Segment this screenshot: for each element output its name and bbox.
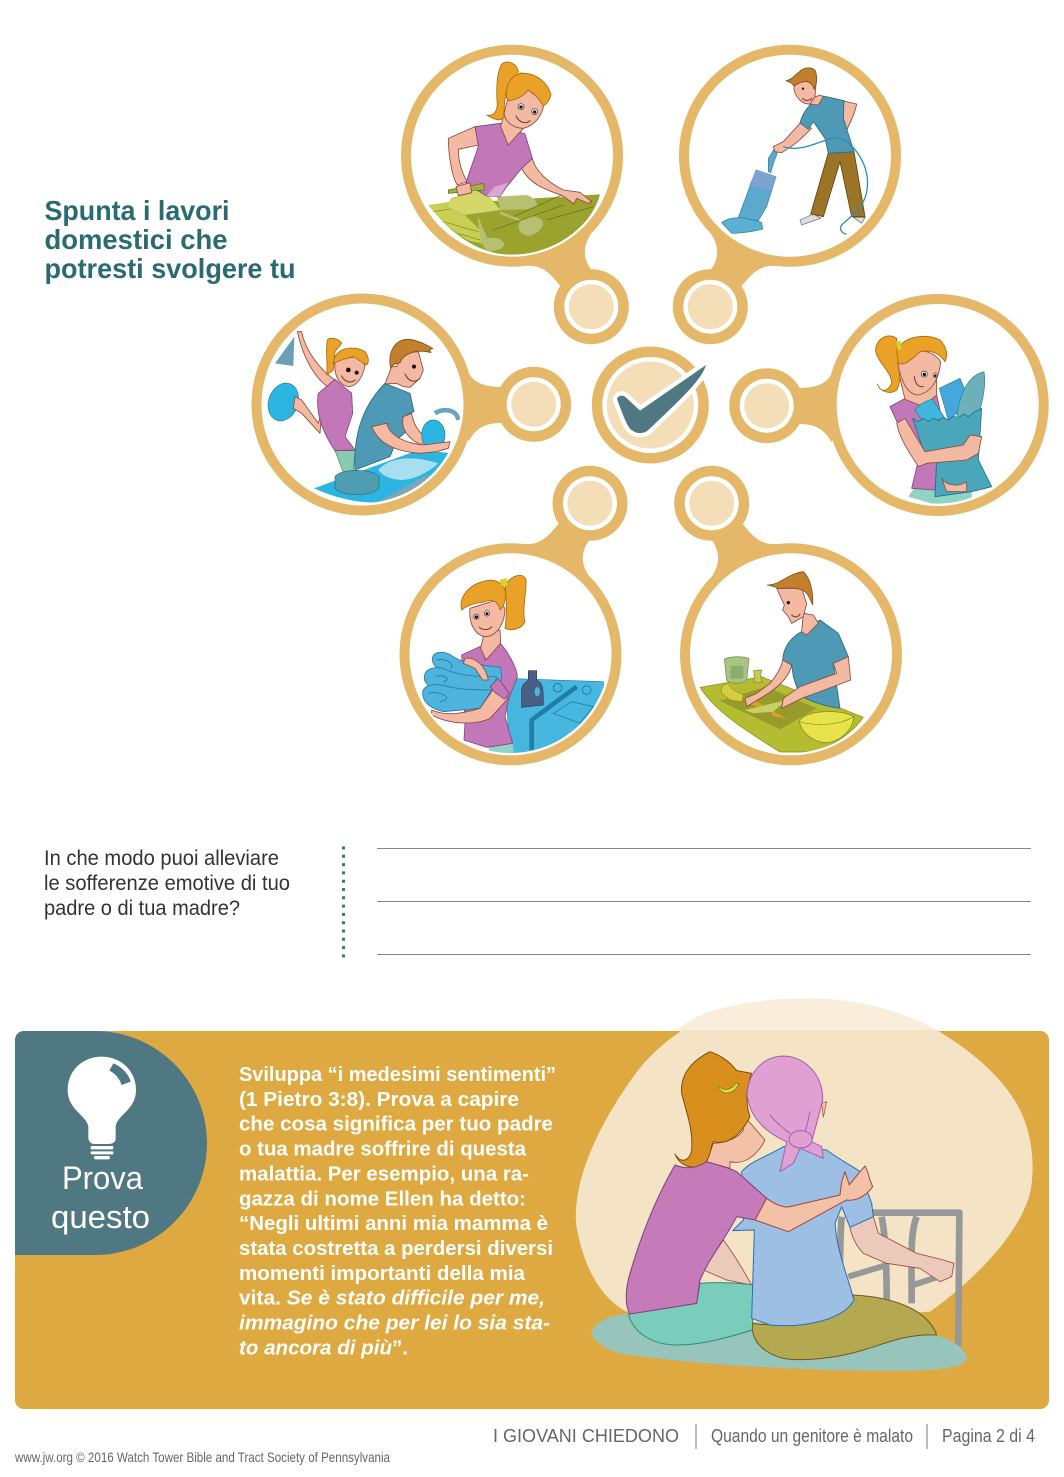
headscarf bbox=[747, 1056, 823, 1172]
seated mother's arm bbox=[850, 1217, 954, 1282]
body text: Sviluppa “i medesimi sentimenti” bbox=[239, 1064, 556, 1086]
heading: chores to tick: potresti svolgere tu bbox=[44, 253, 296, 284]
body text: “Negli ultimi anni mia mamma è bbox=[239, 1213, 548, 1235]
question text: In che modo puoi alleviare bbox=[44, 847, 279, 870]
icon: light bulb bbox=[68, 1057, 136, 1159]
girl's arm around mother bbox=[755, 1166, 873, 1232]
illustration: boy chopping vegetables bbox=[700, 572, 863, 752]
dotted divider bbox=[342, 846, 345, 958]
badge label bbox=[51, 1160, 150, 1235]
heading: chores to tick bbox=[44, 195, 296, 284]
cream backdrop bbox=[576, 998, 1033, 1323]
body text: to ancora di più”. bbox=[239, 1337, 408, 1359]
mother's ear bbox=[822, 1102, 827, 1117]
panel: try this bbox=[15, 998, 1049, 1409]
heading: chores to tick: Spunta i lavori bbox=[44, 195, 230, 226]
girl's far arm bbox=[703, 1240, 752, 1285]
panel background bbox=[15, 1031, 1049, 1409]
chore diagram: frame of circles and connectors bbox=[252, 45, 1049, 765]
body text: (1 Pietro 3:8). Prova a capire bbox=[239, 1089, 519, 1111]
heading: chores to tick: domestici che bbox=[44, 224, 228, 255]
chair bbox=[840, 1213, 959, 1347]
girl's hair bbox=[675, 1052, 752, 1167]
mother's shirt bbox=[733, 1147, 873, 1326]
illustration: boy vacuuming bbox=[722, 68, 868, 234]
girl's neck bbox=[707, 1113, 765, 1168]
girl's shirt bbox=[626, 1162, 767, 1314]
body text: immagino che per lei lo sia sta- bbox=[239, 1312, 550, 1334]
badge label: questo bbox=[51, 1199, 150, 1235]
illustration: girl ironing bbox=[428, 62, 600, 255]
copyright: www.jw.org © 2016 Watch Tower Bible and Tract Society of Pennsylvania bbox=[14, 1449, 390, 1465]
illustration: girl folding laundry bbox=[423, 575, 603, 753]
answer lines bbox=[377, 848, 1031, 954]
badge label: Prova bbox=[62, 1160, 143, 1196]
illustration: girl carrying groceries bbox=[876, 336, 992, 505]
body text bbox=[239, 1064, 556, 1359]
body text: stata costretta a perdersi diversi bbox=[239, 1238, 553, 1260]
girl's trousers bbox=[628, 1283, 753, 1345]
body text: vita. Se è stato difficile per me, bbox=[239, 1288, 545, 1310]
footer: series and page: Quando un genitore è malato bbox=[711, 1426, 913, 1446]
illustration: girl comforting her sick mother bbox=[576, 998, 1033, 1371]
question text bbox=[44, 847, 290, 920]
footer: series and page bbox=[493, 1424, 1035, 1449]
body text: malattia. Per esempio, una ra- bbox=[239, 1163, 529, 1185]
question text: padre o di tua madre? bbox=[44, 897, 240, 920]
question text: le sofferenze emotive di tuo bbox=[44, 872, 290, 895]
mother's trousers bbox=[752, 1295, 937, 1360]
body text: o tua madre soffrire di questa bbox=[239, 1139, 527, 1161]
icon: check mark bbox=[617, 365, 706, 433]
illustration: washing dishes bbox=[263, 332, 458, 503]
footer: series and page: Pagina 2 di 4 bbox=[942, 1426, 1035, 1446]
floor shadow bbox=[592, 1313, 967, 1371]
teal badge bbox=[15, 1031, 207, 1255]
body text: momenti importanti della mia bbox=[239, 1263, 526, 1285]
footer: series and page: I GIOVANI CHIEDONO bbox=[493, 1426, 679, 1446]
body text: che cosa significa per tuo padre bbox=[239, 1114, 553, 1136]
body text: gazza di nome Ellen ha detto: bbox=[239, 1188, 526, 1210]
